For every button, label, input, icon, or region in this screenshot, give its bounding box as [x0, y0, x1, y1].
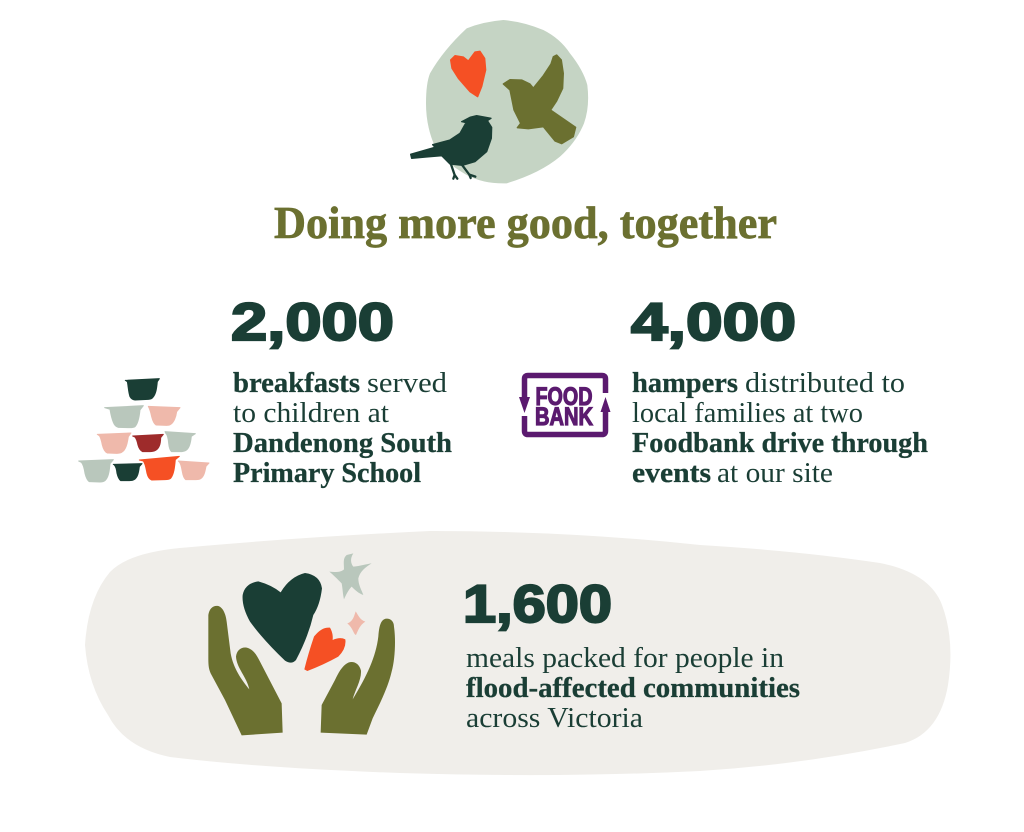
- text: breakfasts: served: [367, 368, 447, 399]
- text: hampers: local families at two: [632, 398, 863, 429]
- text: hampers: at our site: [717, 458, 833, 489]
- text: hampers: distributed to: [745, 368, 905, 399]
- text: breakfasts: to children at: [233, 398, 389, 429]
- text: meals: meals packed for people in: [466, 643, 784, 674]
- stat: 1,600 number: 1,600: [463, 575, 612, 634]
- text: breakfasts: Primary School: [233, 458, 421, 489]
- icon: Foodbank logo: FOOD: [536, 383, 592, 411]
- text: breakfasts: [233, 368, 452, 489]
- panel: flood meals background: [85, 531, 950, 775]
- text: hampers: [632, 368, 928, 489]
- text: breakfasts: Dandenong South: [233, 428, 452, 459]
- text: meals: flood-affected communities: [466, 673, 800, 704]
- icon: birds and heart: [411, 20, 588, 183]
- icon: Foodbank logo: [519, 376, 610, 434]
- title: Doing more good, together: [274, 197, 777, 248]
- stat: 4,000 number: 4,000: [631, 293, 796, 352]
- text: hampers: hampers: [632, 368, 738, 399]
- text: hampers: Foodbank drive through: [632, 428, 928, 459]
- text: meals: across Victoria: [466, 703, 644, 734]
- text: breakfasts: breakfasts: [233, 368, 360, 399]
- text: meals: [466, 643, 800, 734]
- text: hampers: events: [632, 458, 711, 489]
- icon: hands with hearts: [208, 553, 395, 735]
- icon: Foodbank logo: BANK: [535, 403, 593, 431]
- icon: stacked bowls: [79, 379, 209, 482]
- stat: 2,000 number: 2,000: [231, 293, 394, 352]
